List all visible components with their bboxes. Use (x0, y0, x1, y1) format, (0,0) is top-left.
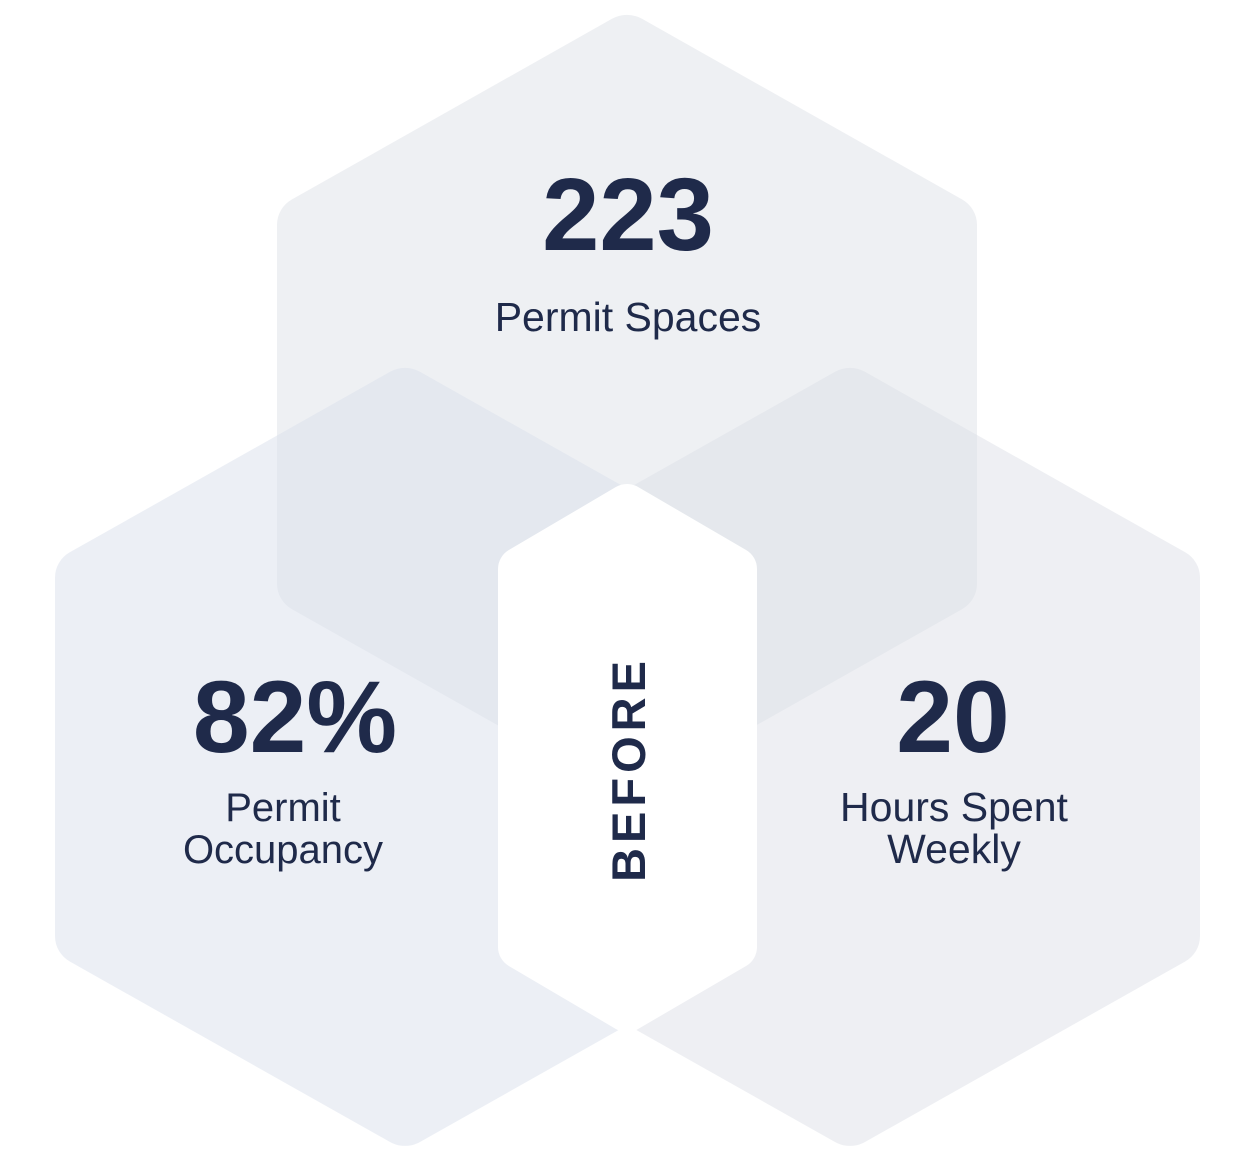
stat: permit occupancy: 82% (193, 660, 397, 774)
stat: permit spaces (495, 157, 761, 340)
hexagon: right (530, 397, 1170, 1117)
stat: permit spaces: 223 (542, 157, 714, 272)
center white region (520, 506, 735, 1010)
stat: hours spent weekly: Hours Spent (840, 784, 1069, 830)
stat: permit spaces: Permit Spaces (495, 294, 761, 340)
stat: hours spent weekly (840, 660, 1069, 872)
stat: permit occupancy: Permit (225, 786, 341, 830)
stat: hours spent weekly: Weekly (887, 826, 1021, 872)
hexagon: top (307, 44, 947, 764)
stat: permit occupancy: Occupancy (183, 828, 383, 872)
stat: permit occupancy (183, 660, 397, 872)
label: BEFORE: BEFORE (602, 656, 655, 882)
stat: hours spent weekly: 20 (896, 660, 1010, 774)
hexagon: left (85, 397, 725, 1117)
